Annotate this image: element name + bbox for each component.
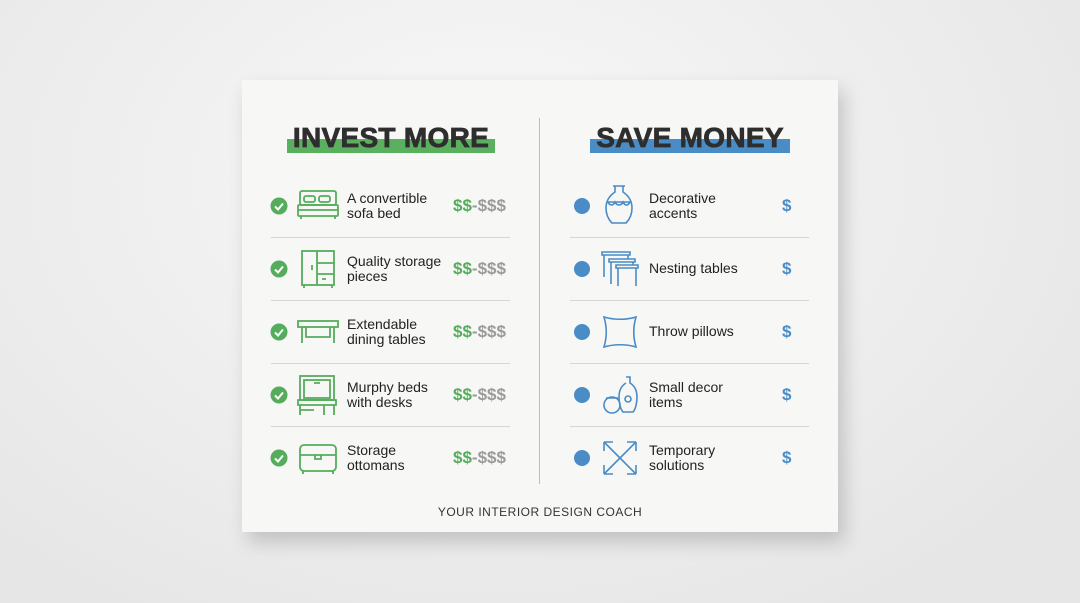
heading: save money: SAVE MONEY [596,122,784,153]
row: sofa bed: $$-$$$ [453,196,506,215]
row: ottomans: ottomans [347,457,405,473]
card [242,80,838,532]
row: dining table: $$-$$$ [453,322,506,341]
row: temporary solutions: $ [782,448,791,467]
row: ottomans [270,442,506,474]
row: temporary solutions [574,441,792,475]
row: small decor [574,376,792,414]
row: throw pillows: Throw pillows [649,323,734,339]
row: storage: pieces [347,268,387,284]
invest list [270,190,506,474]
row: decorative accents [574,185,792,224]
row: murphy beds: with desks [347,394,412,410]
row: decorative accents: accents [649,205,697,221]
row: temporary solutions: solutions [649,457,704,473]
footer: YOUR INTERIOR DESIGN COACH [438,505,642,519]
row: decorative accents: Decorative [649,190,716,206]
row: storage: Quality storage [347,253,441,269]
row: sofa bed: A convertible [347,190,427,206]
row: ottomans: Storage [347,442,396,458]
row: storage: $$-$$$ [453,259,506,278]
row: storage [270,250,506,288]
save list [574,185,792,475]
row: nesting tables: $ [782,259,791,278]
row: murphy beds: $$-$$$ [453,385,506,404]
row: dining table [270,316,506,347]
row: sofa bed: sofa bed [347,205,401,221]
row: murphy beds: Murphy beds [347,379,428,395]
row: throw pillows: $ [782,322,791,341]
divider [539,118,540,484]
row: small decor: items [649,394,682,410]
row: ottomans: $$-$$$ [453,448,506,467]
heading: invest more: INVEST MORE [293,122,489,153]
row: nesting tables [574,251,792,286]
row: murphy beds [270,375,506,415]
row: nesting tables: Nesting tables [649,260,738,276]
row: decorative accents: $ [782,196,791,215]
row: dining table: Extendable [347,316,417,332]
row: throw pillows [574,316,792,348]
row: dining table: dining tables [347,331,426,347]
row: small decor: $ [782,385,791,404]
row: temporary solutions: Temporary [649,442,715,458]
separators [271,237,510,238]
row: sofa bed [270,190,506,221]
row: small decor: Small decor [649,379,723,395]
